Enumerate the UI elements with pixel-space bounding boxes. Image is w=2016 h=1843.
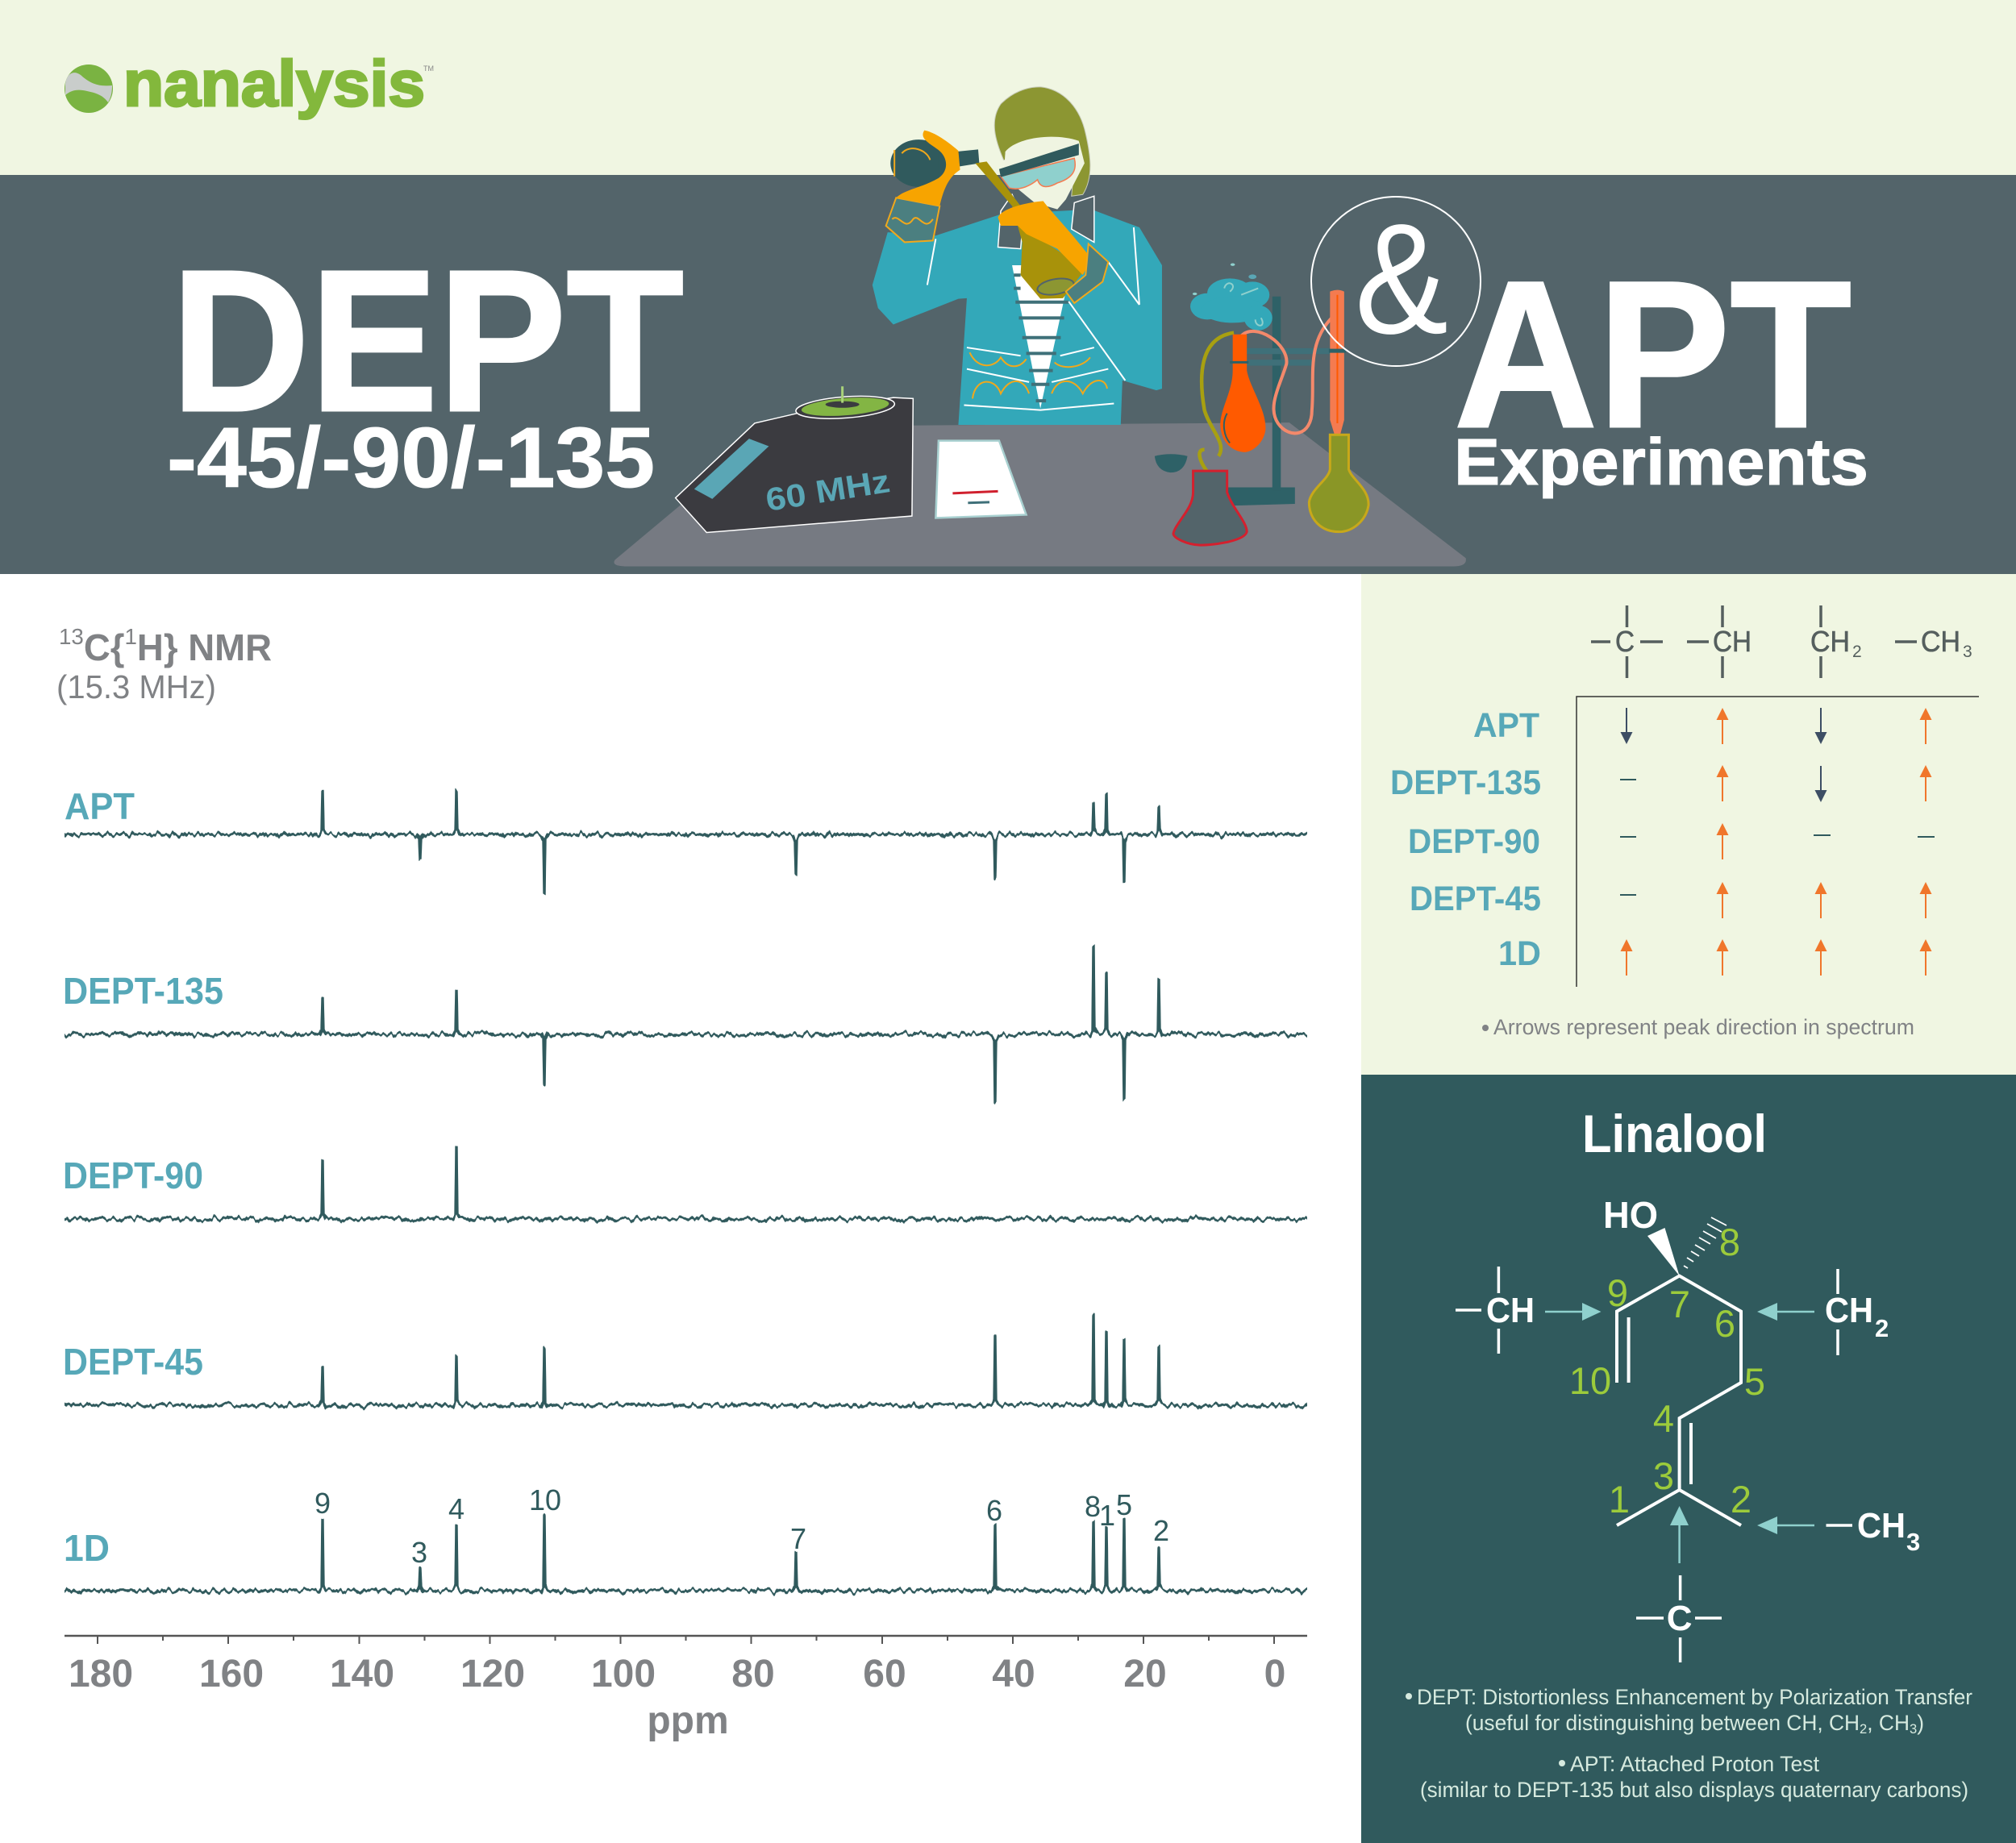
- spectrum labels: DEPT-45: [63, 1341, 203, 1383]
- right bottle: [975, 161, 1085, 299]
- table column headers: carbon types: C: [1615, 625, 1635, 658]
- spectra heading: H} NMR: [137, 626, 272, 668]
- x axis: ppm: 40: [992, 1653, 1035, 1695]
- spectra heading: [56, 624, 272, 705]
- x axis: ppm: 120: [460, 1653, 525, 1695]
- panel: linalool background: [1361, 1075, 2016, 1843]
- left flask: [890, 139, 979, 187]
- table row labels: DEPT-135: [1390, 763, 1541, 802]
- molecule: carbon numbers: 10: [1569, 1359, 1611, 1402]
- spectrum labels: [63, 785, 223, 1569]
- table row labels: DEPT-45: [1410, 880, 1541, 918]
- spectrum labels: 1D: [64, 1527, 110, 1569]
- table column headers: carbon types: CH: [1713, 625, 1752, 658]
- peak assignment numbers: 3: [411, 1536, 427, 1569]
- molecule: carbon numbers: 9: [1607, 1271, 1628, 1314]
- definitions text: 3: [1910, 1721, 1917, 1737]
- lab bench: [614, 422, 1466, 567]
- spectrum labels: DEPT-135: [63, 970, 223, 1012]
- table note: Arrows represent peak direction in spectrum: [1493, 1015, 1914, 1039]
- table row labels: [1390, 706, 1541, 973]
- panel: peak direction table background: [1361, 574, 2016, 1075]
- molecule: linalool skeleton: HO: [1603, 1194, 1658, 1236]
- right glove: [998, 201, 1091, 275]
- molecule: pointer arrows: [1545, 1303, 1814, 1563]
- definitions text: (useful for distinguishing between CH, CH: [1465, 1711, 1869, 1735]
- left glove: [896, 131, 960, 206]
- molecule: carbon numbers: 4: [1653, 1397, 1674, 1440]
- spectra heading: 1: [124, 624, 137, 649]
- orange round flask: [1220, 335, 1265, 452]
- molecule: carbon numbers: 6: [1714, 1302, 1735, 1345]
- peak assignment numbers: 10: [529, 1483, 561, 1516]
- definitions text: 2: [1860, 1721, 1867, 1737]
- trace: 1D: [65, 1515, 1307, 1591]
- table axes: [1577, 697, 1979, 987]
- collar: [998, 194, 1094, 249]
- ampersand badge: [1311, 191, 1481, 367]
- peak assignment numbers: 1: [1099, 1499, 1115, 1532]
- molecule: carbon numbers: 2: [1731, 1478, 1752, 1521]
- table peak direction arrows: [1620, 708, 1935, 976]
- spectra heading: C{: [84, 626, 124, 668]
- definitions text: [1406, 1685, 1972, 1802]
- table column headers: carbon types: CH: [1921, 625, 1960, 658]
- left cuff: [886, 198, 939, 242]
- peak assignment numbers: 7: [790, 1522, 806, 1555]
- peak assignment numbers: 4: [448, 1492, 464, 1525]
- hair: [994, 87, 1090, 196]
- molecule: linalool skeleton: [1603, 1194, 1741, 1525]
- x axis: ppm: 80: [731, 1653, 775, 1695]
- x axis: ppm: 60: [863, 1653, 906, 1695]
- chart: NMR spectra traces: [65, 790, 1307, 1591]
- table row labels: DEPT-90: [1408, 822, 1540, 861]
- spectrum labels: DEPT-90: [63, 1154, 203, 1196]
- title: APT Experiments: APT: [1454, 238, 1851, 471]
- peak assignment numbers: 9: [314, 1487, 331, 1520]
- paper: [935, 441, 1027, 518]
- logo: nanalysis: nanalysis: [123, 48, 425, 119]
- striped shirt: [1012, 265, 1072, 409]
- small dish: [1155, 454, 1188, 472]
- trace: DEPT-45: [65, 1315, 1307, 1405]
- label: CH group: CH: [1486, 1291, 1535, 1330]
- x axis: ppm: 20: [1123, 1653, 1167, 1695]
- vapour cloud: [1190, 264, 1272, 331]
- x axis: ppm: 100: [591, 1653, 656, 1695]
- spectra heading: (15.3 MHz): [56, 668, 216, 705]
- peak assignment numbers: 6: [986, 1494, 1002, 1527]
- coat details: [927, 227, 1139, 410]
- table column headers: carbon types: 3: [1963, 643, 1972, 661]
- face: [1004, 137, 1085, 210]
- bottle mouth: [1033, 276, 1078, 298]
- top cream band: [0, 0, 2016, 175]
- molecule: carbon numbers: 3: [1653, 1454, 1674, 1497]
- instrument label: 60 MHz: 60 MHz: [764, 464, 892, 518]
- title: APT Experiments: Experiments: [1454, 426, 1868, 499]
- illustration: chemist at lab bench: [614, 87, 1466, 567]
- ampersand badge: &: [1355, 191, 1448, 367]
- peak assignment numbers: 2: [1153, 1514, 1169, 1547]
- yellow tubing: [1199, 333, 1234, 471]
- definitions text: , CH: [1867, 1711, 1910, 1735]
- molecule: carbon numbers: 1: [1609, 1478, 1630, 1521]
- label: CH3 group: [1826, 1506, 1920, 1556]
- peak assignment numbers: [314, 1483, 1169, 1569]
- peak assignment numbers: 8: [1085, 1490, 1101, 1523]
- heading: Linalool: Linalool: [1582, 1104, 1767, 1163]
- x axis: ppm: 140: [330, 1653, 394, 1695]
- label: quaternary C group: [1636, 1575, 1722, 1662]
- logo: nanalysis: TM: [423, 64, 434, 73]
- wedge bond: [1647, 1228, 1680, 1275]
- salmon tubing: [1241, 318, 1331, 433]
- label: CH group: [1456, 1267, 1535, 1354]
- definitions text: ): [1917, 1711, 1924, 1735]
- erlenmeyer flask: [1173, 471, 1247, 545]
- spectrum labels: APT: [65, 785, 135, 827]
- x axis: ppm: ppm: [647, 1699, 729, 1742]
- trace: DEPT-90: [65, 1148, 1307, 1219]
- label: CH3 group: 3: [1906, 1528, 1920, 1556]
- label: CH2 group: CH: [1825, 1291, 1873, 1330]
- definitions text: (similar to DEPT-135 but also displays quaternary carbons): [1420, 1778, 1968, 1802]
- x axis: ppm: 180: [69, 1653, 133, 1695]
- table column headers: carbon types: [1591, 605, 1972, 678]
- spectra heading: 13: [59, 624, 84, 649]
- chemist: [873, 87, 1162, 425]
- molecule: carbon numbers: 5: [1744, 1360, 1765, 1403]
- table column headers: carbon types: 2: [1852, 643, 1862, 661]
- hashed bond: [1684, 1217, 1727, 1268]
- label: CH3 group: CH: [1857, 1506, 1906, 1546]
- label: quaternary C group: C: [1667, 1599, 1692, 1638]
- goggles: [999, 144, 1079, 189]
- label: CH2 group: [1825, 1269, 1889, 1355]
- olive flask: [1309, 435, 1368, 532]
- right cuff: [1066, 243, 1108, 303]
- condenser tube: [1329, 290, 1346, 435]
- x axis: ppm: [65, 1636, 1307, 1742]
- molecule: carbon numbers: 8: [1719, 1221, 1740, 1263]
- x axis: ppm: 0: [1264, 1653, 1285, 1695]
- table row labels: APT: [1473, 706, 1539, 745]
- peak assignment numbers: 5: [1116, 1488, 1132, 1521]
- trace: APT: [65, 790, 1307, 893]
- label: CH2 group: 2: [1875, 1314, 1889, 1342]
- definitions text: DEPT: Distortionless Enhancement by Polarization Transfer: [1417, 1685, 1972, 1709]
- molecule: carbon numbers: [1569, 1221, 1765, 1521]
- instrument: 60 MHz NMR: [676, 386, 913, 532]
- x axis: ppm: 160: [199, 1653, 264, 1695]
- stand: [1227, 297, 1335, 505]
- title: DEPT: -45/-90/-135: [167, 410, 655, 505]
- trace: DEPT-135: [65, 946, 1307, 1102]
- header dark band: [0, 175, 2016, 574]
- molecule: carbon numbers: 7: [1669, 1283, 1690, 1325]
- table column headers: carbon types: CH: [1810, 625, 1850, 658]
- left cuff wave: [892, 218, 933, 224]
- table row labels: 1D: [1498, 934, 1541, 973]
- title: DEPT: DEPT: [171, 228, 684, 453]
- definitions text: APT: Attached Proton Test: [1570, 1752, 1819, 1776]
- coat: [873, 210, 1162, 425]
